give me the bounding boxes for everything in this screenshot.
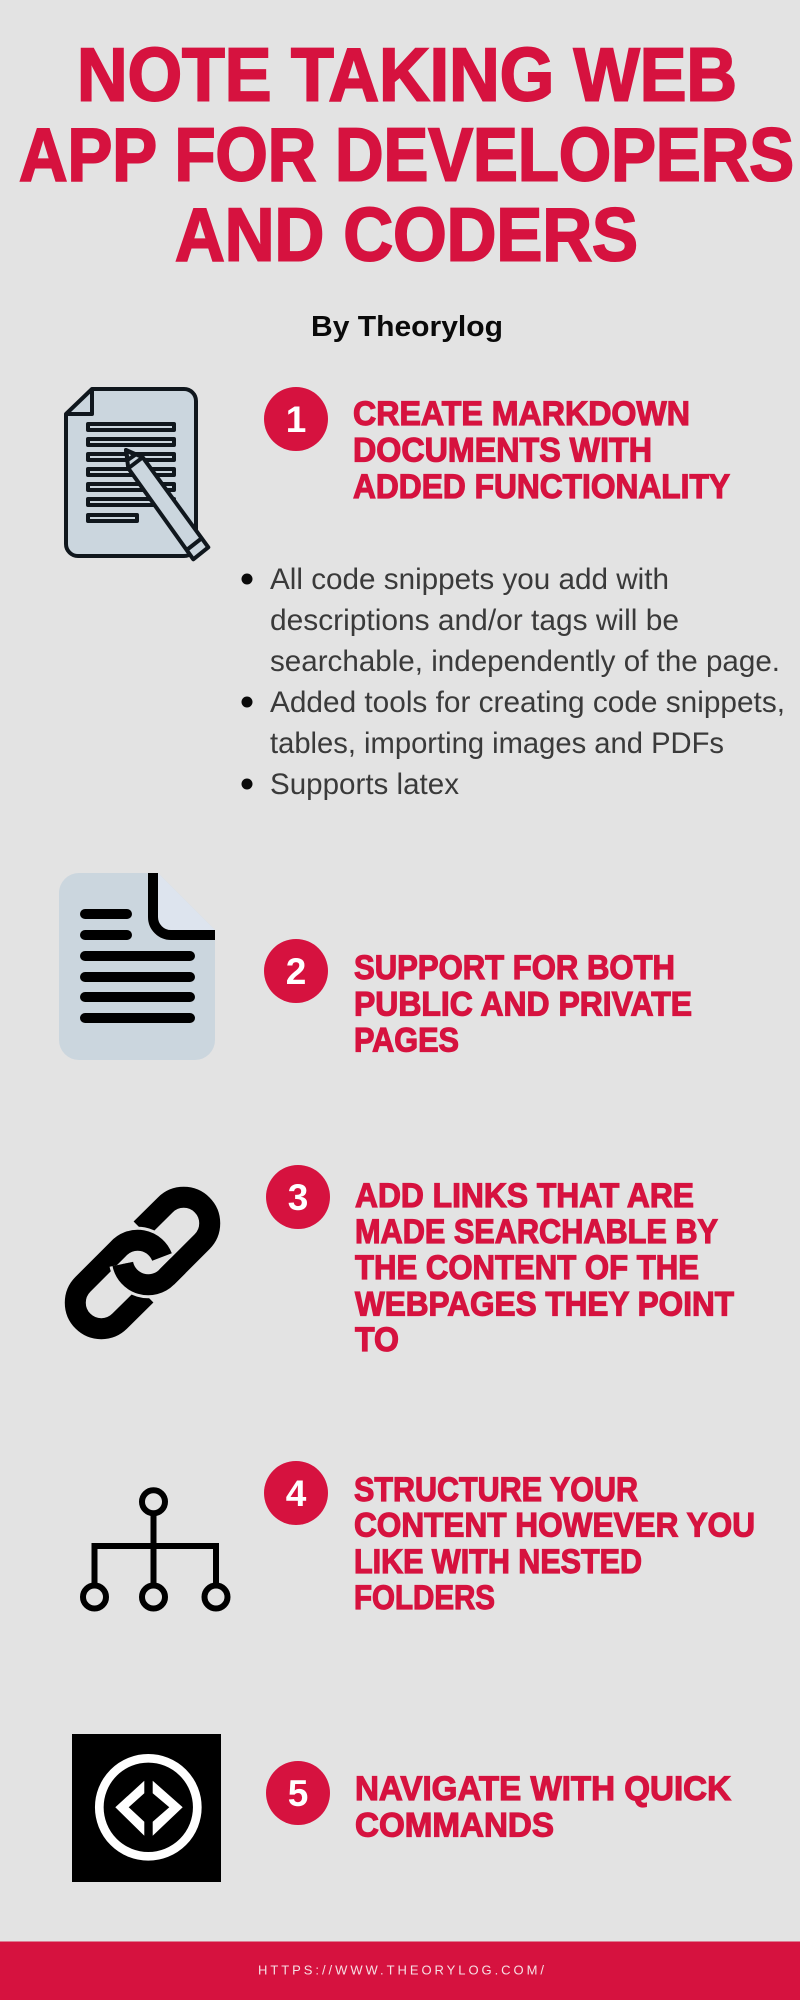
heading 3: MADE SEARCHABLE BY — [355, 1213, 718, 1251]
heading 3: WEBPAGES THEY POINT — [355, 1286, 734, 1324]
bullet list: searchable, independently of the page. — [270, 645, 780, 678]
number badge 5 — [266, 1761, 330, 1825]
heading 4: STRUCTURE YOUR — [354, 1471, 638, 1509]
icon: folder tree — [83, 1490, 228, 1608]
heading 3 — [355, 1177, 734, 1359]
number badge 2: 2 — [286, 951, 306, 992]
heading 2 — [354, 949, 692, 1060]
bullet list: tables, importing images and PDFs — [270, 727, 724, 760]
heading 5: NAVIGATE WITH QUICK — [355, 1770, 731, 1808]
panel: step 2 — [59, 873, 692, 1060]
number badge 5: 5 — [288, 1773, 308, 1814]
icon: document with pencil — [66, 389, 208, 559]
heading 3: THE CONTENT OF THE — [355, 1249, 699, 1287]
heading 1: CREATE MARKDOWN — [353, 395, 690, 433]
heading 3: ADD LINKS THAT ARE — [355, 1177, 694, 1215]
number badge 1: 1 — [286, 399, 306, 440]
bullet list — [242, 563, 785, 801]
bullet list: Added tools for creating code snippets, — [270, 686, 785, 719]
heading 2: PAGES — [354, 1022, 459, 1060]
number badge 1 — [264, 387, 328, 451]
title: AND CODERS — [175, 192, 638, 276]
panel: step 4 — [83, 1461, 755, 1617]
icon: code command — [72, 1734, 221, 1882]
heading 4: LIKE WITH NESTED — [354, 1543, 642, 1581]
title — [19, 32, 794, 276]
heading 5 — [355, 1770, 731, 1844]
heading 4: FOLDERS — [354, 1579, 495, 1617]
heading 3: TO — [355, 1321, 399, 1359]
heading 5: COMMANDS — [355, 1806, 554, 1844]
number badge 3: 3 — [288, 1177, 308, 1218]
bullet list: Supports latex — [270, 768, 459, 801]
byline: By Theorylog — [311, 311, 503, 343]
title: NOTE TAKING WEB — [77, 32, 737, 116]
panel: step 1 — [66, 387, 785, 801]
number badge 3 — [266, 1165, 330, 1229]
bullet list: descriptions and/or tags will be — [270, 604, 679, 637]
icon: chain link — [75, 1197, 210, 1329]
footer bar — [0, 1942, 800, 2000]
heading 1: DOCUMENTS WITH — [353, 432, 652, 470]
panel: step 3 — [75, 1165, 734, 1359]
number badge 4 — [264, 1461, 328, 1525]
icon: text document — [59, 873, 215, 1060]
heading 4: CONTENT HOWEVER YOU — [354, 1506, 755, 1544]
heading 2: SUPPORT FOR BOTH — [354, 949, 675, 987]
heading 1 — [353, 395, 730, 506]
bullet list: All code snippets you add with — [270, 563, 669, 596]
number badge 4: 4 — [286, 1473, 307, 1514]
footer bar: HTTPS://WWW.THEORYLOG.COM/ — [258, 1962, 544, 1978]
heading 2: PUBLIC AND PRIVATE — [354, 986, 692, 1024]
panel: step 5 — [72, 1734, 731, 1882]
heading 4 — [354, 1471, 755, 1617]
heading 1: ADDED FUNCTIONALITY — [353, 468, 730, 506]
number badge 2 — [264, 939, 328, 1003]
